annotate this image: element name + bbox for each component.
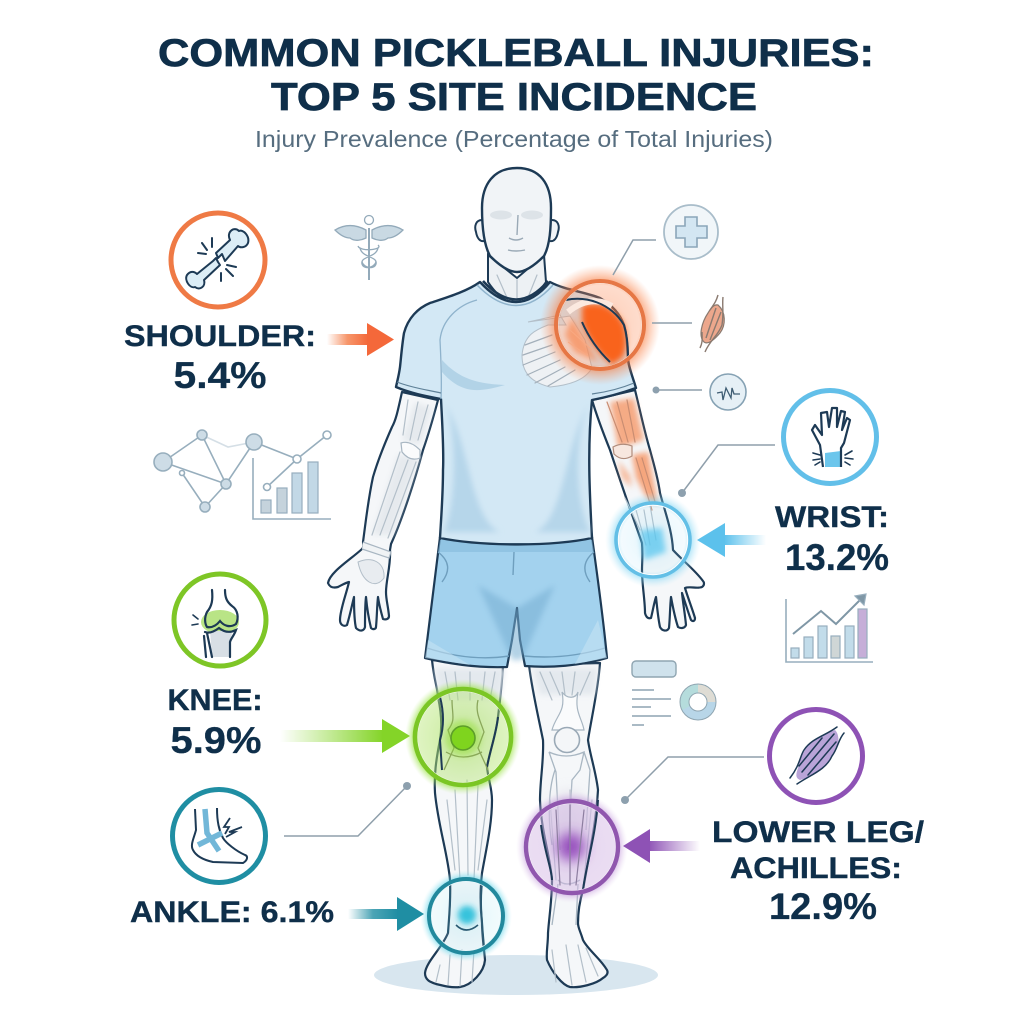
subtitle: Injury Prevalence (Percentage of Total Injuries) bbox=[255, 126, 773, 152]
arrow: knee bbox=[280, 719, 410, 753]
right leg bbox=[529, 663, 608, 987]
injury site: knee bbox=[405, 679, 521, 795]
icon: report and donut bbox=[632, 661, 716, 725]
icon: shoulder bone badge bbox=[171, 213, 265, 307]
icon: heartbeat bbox=[710, 374, 746, 410]
ground shadow bbox=[374, 955, 658, 995]
title bbox=[158, 32, 874, 119]
left leg bbox=[425, 660, 503, 987]
body figure bbox=[328, 168, 704, 987]
label: lower leg bbox=[712, 816, 925, 927]
shirt shading bbox=[397, 281, 634, 532]
icon: lower leg muscle badge bbox=[770, 710, 862, 802]
neck bbox=[488, 255, 546, 304]
icon: bar chart left bbox=[253, 458, 331, 519]
label: wrist bbox=[775, 501, 889, 578]
icon: network graph bbox=[154, 430, 331, 512]
chest muscle detail bbox=[522, 315, 592, 387]
leg anatomy bbox=[435, 668, 598, 986]
icon: caduceus bbox=[335, 216, 403, 280]
injury site: shoulder bbox=[540, 265, 660, 385]
label: wrist: WRIST: bbox=[775, 501, 889, 534]
injury site: ankle bbox=[420, 870, 512, 962]
arrow: wrist bbox=[697, 523, 766, 557]
label: shoulder: SHOULDER: bbox=[124, 320, 316, 353]
title: TOP 5 SITE INCIDENCE bbox=[271, 76, 757, 119]
arrow: ankle bbox=[348, 897, 424, 931]
right arm bbox=[592, 390, 704, 631]
icon: medical cross bbox=[664, 205, 718, 259]
icon: bar chart right bbox=[786, 594, 873, 662]
injury site: lower leg bbox=[516, 791, 628, 903]
label: knee: KNEE: bbox=[168, 684, 262, 717]
head bbox=[475, 168, 559, 272]
icon: muscle bbox=[700, 295, 724, 352]
label: wrist: 13.2% bbox=[785, 537, 889, 578]
injury site: wrist bbox=[605, 492, 701, 588]
arrow: lower leg bbox=[623, 829, 700, 863]
left arm bbox=[328, 392, 438, 631]
shorts bbox=[425, 537, 607, 667]
label: shoulder: 5.4% bbox=[174, 355, 266, 396]
label: shoulder bbox=[124, 320, 316, 396]
shirt bbox=[396, 282, 636, 544]
label: lower leg: LOWER LEG/ bbox=[712, 816, 925, 849]
title: COMMON PICKLEBALL INJURIES: bbox=[158, 32, 874, 75]
shorts shading bbox=[425, 540, 607, 665]
label: lower leg: ACHILLES: bbox=[730, 852, 902, 885]
label: knee bbox=[168, 684, 262, 761]
label: knee: 5.9% bbox=[170, 720, 262, 761]
icon: knee badge bbox=[174, 574, 266, 666]
label: ankle: ANKLE: 6.1% bbox=[130, 896, 334, 929]
arm anatomy bbox=[358, 398, 666, 584]
icon: ankle badge bbox=[172, 790, 266, 882]
leader lines bbox=[284, 240, 775, 836]
arrow: shoulder bbox=[327, 323, 394, 356]
icon: wrist hand badge bbox=[784, 390, 876, 484]
label: lower leg: 12.9% bbox=[769, 886, 877, 927]
